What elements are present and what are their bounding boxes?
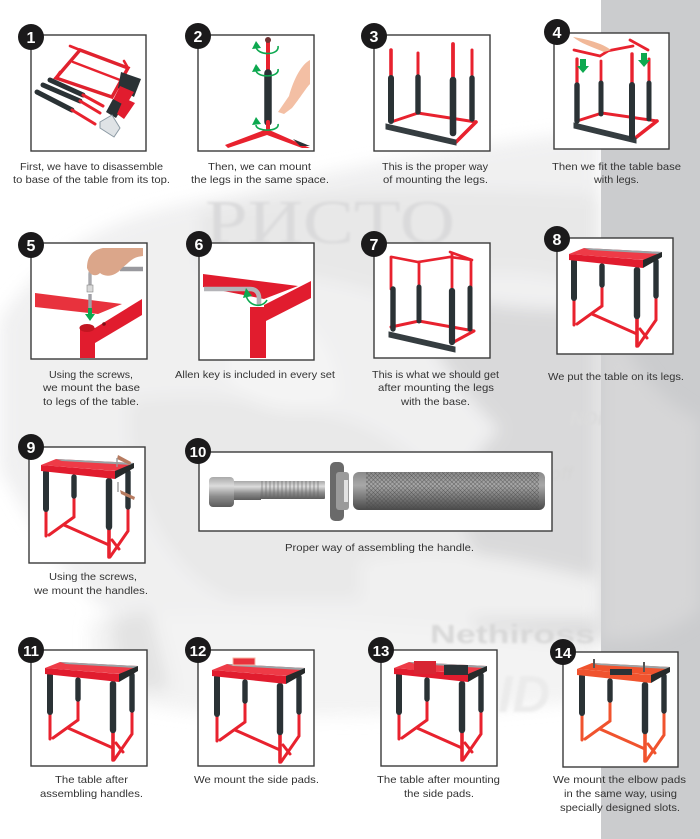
icon: table with side pads bbox=[394, 662, 487, 760]
caption: step 7 bbox=[372, 369, 499, 408]
step 10 badge bbox=[185, 438, 211, 464]
panel: step 13 bbox=[381, 650, 497, 766]
caption: step 13: The table after mounting bbox=[377, 774, 500, 786]
step 7 badge: 7 bbox=[370, 237, 379, 254]
step 8 badge: 8 bbox=[553, 232, 562, 249]
step 12 badge: 12 bbox=[190, 643, 206, 660]
icon: knurled handle bbox=[353, 472, 545, 510]
grey side strip bbox=[601, 0, 700, 839]
step 14 badge: 14 bbox=[555, 645, 572, 662]
caption: step 1: First, we have to disassemble bbox=[20, 161, 163, 173]
step 2 badge: 2 bbox=[194, 29, 203, 46]
step 9 badge bbox=[18, 434, 44, 460]
caption: step 3 bbox=[382, 161, 489, 186]
icon: side pads bbox=[414, 661, 468, 675]
step 8 badge bbox=[544, 226, 570, 252]
step 13 badge: 13 bbox=[373, 643, 389, 660]
icon: table with handles being mounted bbox=[41, 459, 134, 557]
caption: step 5: we mount the base bbox=[42, 382, 140, 394]
caption: step 14: in the same way, using bbox=[564, 788, 677, 800]
caption: step 11: The table after bbox=[55, 774, 129, 786]
step 6 badge bbox=[186, 231, 212, 257]
caption: step 4: with legs. bbox=[593, 174, 639, 186]
step 1 badge bbox=[18, 24, 44, 50]
caption: step 14: specially designed slots. bbox=[560, 802, 680, 814]
caption: step 6: Allen key is included in every set bbox=[175, 369, 335, 381]
panel: step 3 bbox=[374, 35, 490, 151]
step 10 badge: 10 bbox=[190, 444, 206, 461]
icon: elbow pads and handles bbox=[594, 659, 644, 675]
icon: legs mounted on base bbox=[386, 44, 476, 145]
panel: step 7 bbox=[374, 243, 490, 358]
ghost sponsor marks: БУЛ bbox=[425, 450, 485, 475]
step 3 badge: 3 bbox=[370, 29, 379, 46]
caption: step 4 bbox=[552, 161, 681, 186]
caption: step 3: This is the proper way bbox=[382, 161, 489, 173]
caption: step 9: we mount the handles. bbox=[33, 585, 148, 597]
caption: step 5 bbox=[42, 369, 140, 408]
caption: step 2: Then, we can mount bbox=[208, 161, 311, 173]
step 6 badge: 6 bbox=[195, 237, 204, 254]
ghost lettering: РИСТО bbox=[205, 189, 455, 257]
caption: step 4: Then we fit the table base bbox=[552, 161, 681, 173]
caption: step 7: with the base. bbox=[400, 396, 470, 408]
icon: table with elbow pads bbox=[577, 663, 670, 761]
caption: step 2: the legs in the same space. bbox=[191, 174, 329, 186]
panel: step 6 bbox=[199, 243, 314, 360]
ghost sponsor marks: loff bbox=[545, 464, 575, 484]
caption: step 10: Proper way of assembling the handle. bbox=[285, 542, 474, 554]
panel: step 2 bbox=[198, 35, 314, 151]
icon: screw driven into base bbox=[35, 248, 143, 358]
icon: side pad bbox=[233, 658, 255, 665]
step 4 badge bbox=[544, 19, 570, 45]
caption: step 11 bbox=[40, 774, 143, 800]
caption: step 1 bbox=[13, 161, 170, 186]
step 12 badge bbox=[185, 637, 211, 663]
step 2 badge bbox=[185, 23, 211, 49]
ghost sponsor marks bbox=[425, 409, 603, 724]
caption: step 7: after mounting the legs bbox=[378, 382, 494, 394]
ghost sponsor marks: ID bbox=[498, 666, 550, 724]
icon: base lowered onto legs bbox=[573, 37, 657, 143]
caption: step 12: We mount the side pads. bbox=[194, 774, 319, 786]
step 14 badge bbox=[550, 639, 576, 665]
icon: washer bbox=[330, 462, 349, 521]
icon: table with handles bbox=[45, 662, 138, 760]
caption: step 11: assembling handles. bbox=[40, 788, 143, 800]
step 5 badge: 5 bbox=[27, 238, 36, 255]
caption: step 3: of mounting the legs. bbox=[383, 174, 488, 186]
icon: leg with rotation arrows and hand bbox=[225, 40, 310, 148]
caption: step 14 bbox=[553, 774, 686, 814]
ghost sponsor marks: Nethiross bbox=[430, 619, 595, 649]
step 11 badge bbox=[18, 637, 44, 663]
caption: step 8: We put the table on its legs. bbox=[548, 371, 684, 383]
icon: disassembled table parts bbox=[37, 46, 141, 137]
panel: step 12 bbox=[198, 650, 314, 766]
panel: step 9 bbox=[29, 447, 145, 563]
panel: step 8 bbox=[557, 238, 673, 354]
caption: step 13 bbox=[377, 774, 500, 800]
caption: step 5: Using the screws, bbox=[49, 369, 133, 381]
panel: step 4 bbox=[554, 33, 669, 149]
caption: step 9 bbox=[33, 571, 148, 597]
step 11 badge: 11 bbox=[23, 643, 39, 660]
icon: table on its legs bbox=[569, 248, 662, 346]
icon: bolt bbox=[209, 477, 325, 507]
step 13 badge bbox=[368, 637, 394, 663]
caption: step 1: to base of the table from its top. bbox=[13, 174, 170, 186]
caption: step 14: We mount the elbow pads bbox=[553, 774, 686, 786]
step 5 badge bbox=[18, 232, 44, 258]
panel: step 5 bbox=[31, 243, 147, 359]
step 3 badge bbox=[361, 23, 387, 49]
step 9 badge: 9 bbox=[27, 440, 36, 457]
icon: legs assembled with base frame bbox=[389, 252, 474, 352]
caption: step 9: Using the screws, bbox=[49, 571, 137, 583]
panel: step 11 bbox=[31, 650, 147, 766]
step 7 badge bbox=[361, 231, 387, 257]
icon: table with side pad bbox=[212, 664, 305, 762]
caption: step 2 bbox=[191, 161, 329, 186]
caption: step 7: This is what we should get bbox=[372, 369, 499, 381]
step 4 badge: 4 bbox=[553, 25, 562, 42]
ghost sponsor marks: NDi bbox=[570, 409, 603, 430]
step 1 badge: 1 bbox=[27, 30, 36, 47]
panel: step 1 bbox=[31, 35, 146, 151]
icon: hands with screws bbox=[117, 455, 135, 500]
panel: step 14 bbox=[563, 652, 678, 767]
caption: step 13: the side pads. bbox=[404, 788, 474, 800]
caption: step 5: to legs of the table. bbox=[43, 396, 139, 408]
icon: allen key in joint bbox=[203, 274, 311, 358]
panel: step 10 bbox=[199, 452, 552, 531]
